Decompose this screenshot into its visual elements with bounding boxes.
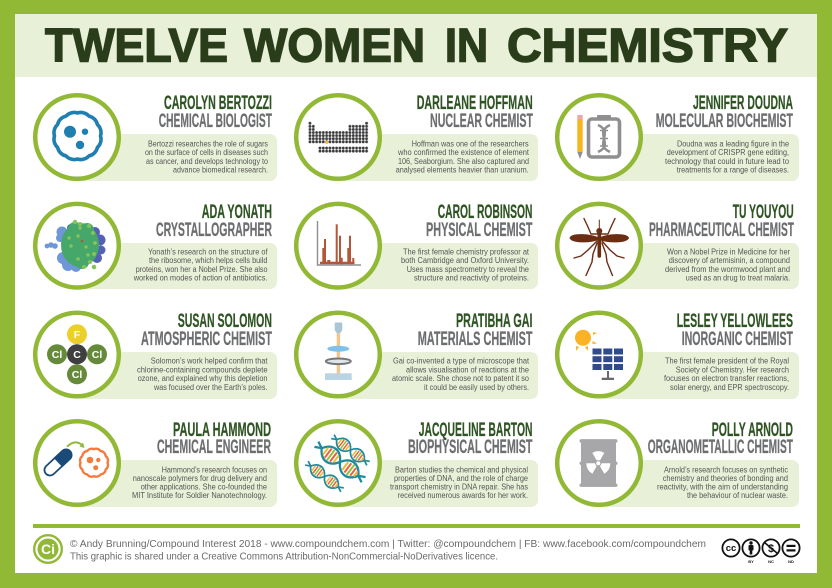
description: Doudna was a leading figure in the: [677, 140, 790, 148]
icon: CFC molecule: F: [74, 329, 81, 341]
icon: Compound Interest logo: [34, 535, 62, 563]
description: ozone, and explained why this depletion: [138, 374, 268, 383]
footer: [33, 524, 800, 564]
icon: Creative Commons badges: BY: [748, 559, 754, 564]
description: [390, 466, 529, 500]
description: Barton studies the chemical and physical: [395, 466, 528, 474]
panel: Pratibha Gai: [296, 310, 538, 399]
name: JACQUELINE BARTON: [419, 419, 532, 441]
description: chemistry and theories of bonding and: [663, 474, 788, 483]
description: discovery of artemisinin, a compound: [669, 256, 790, 265]
panel: Lesley Yellowlees: [557, 310, 799, 399]
panel: Polly Arnold: [557, 419, 799, 507]
description: Uses mass spectrometry to reveal the: [407, 265, 530, 274]
icon: CFC molecule: Cl: [52, 349, 62, 361]
role: CRYSTALLOGRAPHER: [156, 219, 272, 241]
description: the behaviour of nuclear waste.: [687, 491, 788, 500]
description: Won a Nobel Prize in Medicine for her: [667, 248, 790, 256]
panel: Tu Youyou: [557, 201, 799, 289]
panel: Darleane Hoffman: [296, 92, 538, 181]
description: Hoffman was one of the researchers: [412, 140, 529, 148]
description: solar energy, and EPR spectroscopy.: [670, 383, 789, 392]
licence text: This graphic is shared under a Creative Commons Attribution-NonCommercial-NoDerivatives licence.: [70, 550, 498, 562]
description: MIT Institute for Soldier Nanotechnology.: [132, 491, 267, 500]
icon: DNA helices: [303, 432, 372, 495]
description: was focused over the Earth’s poles.: [153, 383, 268, 392]
description: on the surface of cells in diseases such: [145, 148, 268, 157]
icon: Creative Commons badges: NC: [768, 559, 774, 564]
icon: ribosome: [45, 220, 106, 272]
description: as cancer, and develops technology to: [146, 157, 269, 166]
panel: Susan Solomon: [35, 310, 277, 399]
description: derived from the wormwood plant and: [665, 265, 790, 274]
icon: Compound Interest logo: Ci: [41, 541, 55, 557]
description: Solomon’s work helped confirm that: [151, 356, 268, 366]
name: CAROLYN BERTOZZI: [164, 92, 272, 114]
description: [396, 140, 530, 174]
description: [665, 140, 790, 174]
icon: CFC molecule: Cl: [72, 369, 82, 381]
description: the ribosome, which helps cells build: [149, 256, 268, 265]
role: NUCLEAR CHEMIST: [430, 110, 533, 132]
name: PRATIBHA GAI: [456, 310, 532, 332]
icon: CFC molecule: Cl: [92, 349, 102, 361]
description: 106, Seaborgium. She also captured and: [398, 157, 529, 166]
description: atomic scale. She chose not to patent it so: [392, 374, 530, 383]
description: nanoscale polymers for drug delivery and: [133, 474, 267, 483]
panel: Ada Yonath: [35, 201, 277, 289]
icon: capsule to cell: [42, 442, 108, 478]
description: technology that could in future lead to: [665, 157, 790, 166]
description: Gai co-invented a type of microscope that: [393, 356, 530, 366]
description: who confirmed the existence of element: [397, 148, 530, 157]
icon: CFC molecule: C: [73, 349, 81, 361]
name: ADA YONATH: [202, 201, 272, 223]
description: The first female chemistry professor at: [403, 248, 530, 256]
description: treatments for a range of diseases.: [677, 166, 789, 174]
icon: Creative Commons badges: cc: [726, 543, 736, 554]
role: CHEMICAL ENGINEER: [157, 436, 271, 458]
description: chlorine-containing compounds deplete: [137, 366, 268, 374]
title: TWELVE: [45, 20, 228, 72]
role: CHEMICAL BIOLOGIST: [159, 110, 272, 132]
description: [664, 356, 789, 392]
icon: pencil and clipboard with DNA: [577, 115, 620, 159]
description: [132, 466, 268, 500]
panel: Carolyn Bertozzi: [35, 92, 277, 181]
description: focuses on electron transfer reactions,: [664, 374, 789, 383]
title: CHEMISTRY: [507, 20, 788, 72]
description: transport chemistry in DNA repair. She has: [390, 482, 528, 492]
description: used as an drug to treat malaria.: [686, 274, 790, 282]
panel: Carol Robinson: [296, 201, 538, 289]
description: [137, 356, 268, 392]
name: SUSAN SOLOMON: [178, 310, 272, 332]
description: both Cambridge and Oxford University.: [401, 256, 529, 265]
panel: Paula Hammond: [35, 419, 277, 507]
description: Yonath’s research on the structure of: [148, 248, 268, 256]
name: CAROL ROBINSON: [438, 201, 532, 223]
description: Arnold’s research focuses on synthetic: [664, 466, 788, 474]
description: other applications. She co-founded the: [141, 482, 268, 492]
description: analysed elements heavier than uranium.: [396, 166, 529, 174]
panel: Jennifer Doudna: [557, 92, 799, 181]
description: properties of DNA, and the role of charge: [394, 474, 529, 483]
icon: nuclear waste barrel: [580, 439, 618, 487]
panel: Jacqueline Barton: [296, 419, 538, 507]
description: [133, 248, 268, 282]
role: BIOPHYSICAL CHEMIST: [408, 436, 533, 458]
title: IN: [445, 20, 488, 72]
description: Bertozzi researches the role of sugars: [148, 140, 268, 148]
description: Hammond’s research focuses on: [162, 466, 267, 474]
icon: Creative Commons badges: $: [768, 543, 774, 555]
description: it could be easily used by others.: [424, 383, 529, 392]
description: [392, 356, 530, 392]
description: reactivity, with the aim of understanding: [657, 482, 788, 492]
icon: CFC molecule: [47, 324, 107, 384]
description: structure and reactivity of proteins.: [414, 274, 529, 282]
title: [15, 14, 817, 77]
description: received numerous awards for her work.: [398, 491, 528, 500]
description: The first female president of the Royal: [665, 356, 789, 366]
name: PAULA HAMMOND: [173, 419, 271, 441]
icon: periodic table: [308, 122, 368, 153]
icon: blue cell: [54, 112, 101, 160]
icon: sun and solar panel: [575, 330, 623, 380]
role: MATERIALS CHEMIST: [418, 328, 533, 350]
icon: Creative Commons badges: ND: [788, 559, 794, 564]
description: development of CRISPR gene editing,: [667, 148, 789, 157]
credit text: © Andy Brunning/Compound Interest 2018 - www.compoundchem.com | Twitter: @compoundchem | FB: www.facebook.com/compoundchem: [70, 538, 706, 550]
name: DARLEANE HOFFMAN: [417, 92, 533, 114]
description: advance biomedical research.: [173, 166, 268, 174]
icon: mass spectrum: [318, 221, 361, 265]
description: worked on modes of action of antibiotics.: [133, 274, 268, 282]
description: [665, 248, 790, 282]
icon: microscope: [325, 322, 352, 380]
description: Society of Chemistry. Her research: [676, 366, 789, 374]
description: [657, 466, 788, 500]
icon: mosquito: [570, 218, 628, 276]
description: [401, 248, 530, 282]
role: PHYSICAL CHEMIST: [426, 219, 533, 241]
description: proteins, won her a Nobel Prize. She also: [136, 265, 268, 274]
role: ATMOSPHERIC CHEMIST: [141, 328, 272, 350]
description: [145, 140, 269, 174]
icon: Creative Commons badges: [722, 539, 800, 564]
description: allows visualisation of reactions at the: [406, 366, 530, 374]
title: WOMEN: [244, 20, 425, 72]
